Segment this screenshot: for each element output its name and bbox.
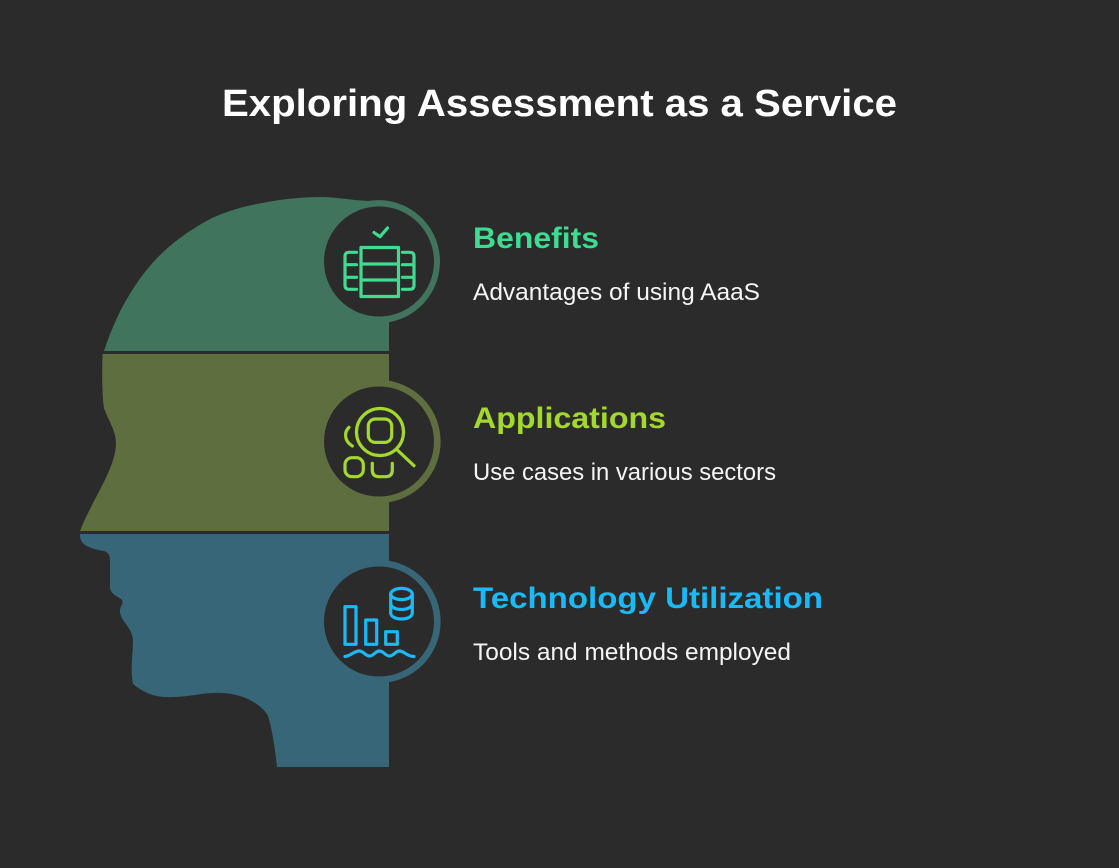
head silhouette	[80, 197, 441, 767]
description: technology utilization: Tools and methods employed	[473, 639, 791, 666]
icon circle: applications	[324, 386, 434, 496]
icon: magnifier over shapes	[345, 408, 414, 477]
icon circle: benefits	[324, 206, 434, 316]
description: benefits: Advantages of using AaaS	[473, 279, 760, 306]
icon: bar chart, database and waves	[345, 588, 414, 656]
title: Exploring Assessment as a Service	[222, 83, 897, 125]
head segment: technology utilization	[80, 534, 441, 767]
icon: server with check mark	[345, 228, 414, 296]
icon circle: technology utilization	[324, 566, 434, 676]
description: applications: Use cases in various sectors	[473, 459, 776, 486]
text block: applications	[473, 402, 776, 486]
text block: benefits	[473, 222, 760, 306]
heading: technology utilization: Technology Utilization	[473, 582, 823, 615]
head segment: benefits	[104, 197, 440, 351]
heading: benefits: Benefits	[473, 222, 599, 255]
text block: technology utilization	[473, 582, 823, 666]
heading: applications: Applications	[473, 402, 666, 435]
head segment: applications	[80, 354, 441, 531]
